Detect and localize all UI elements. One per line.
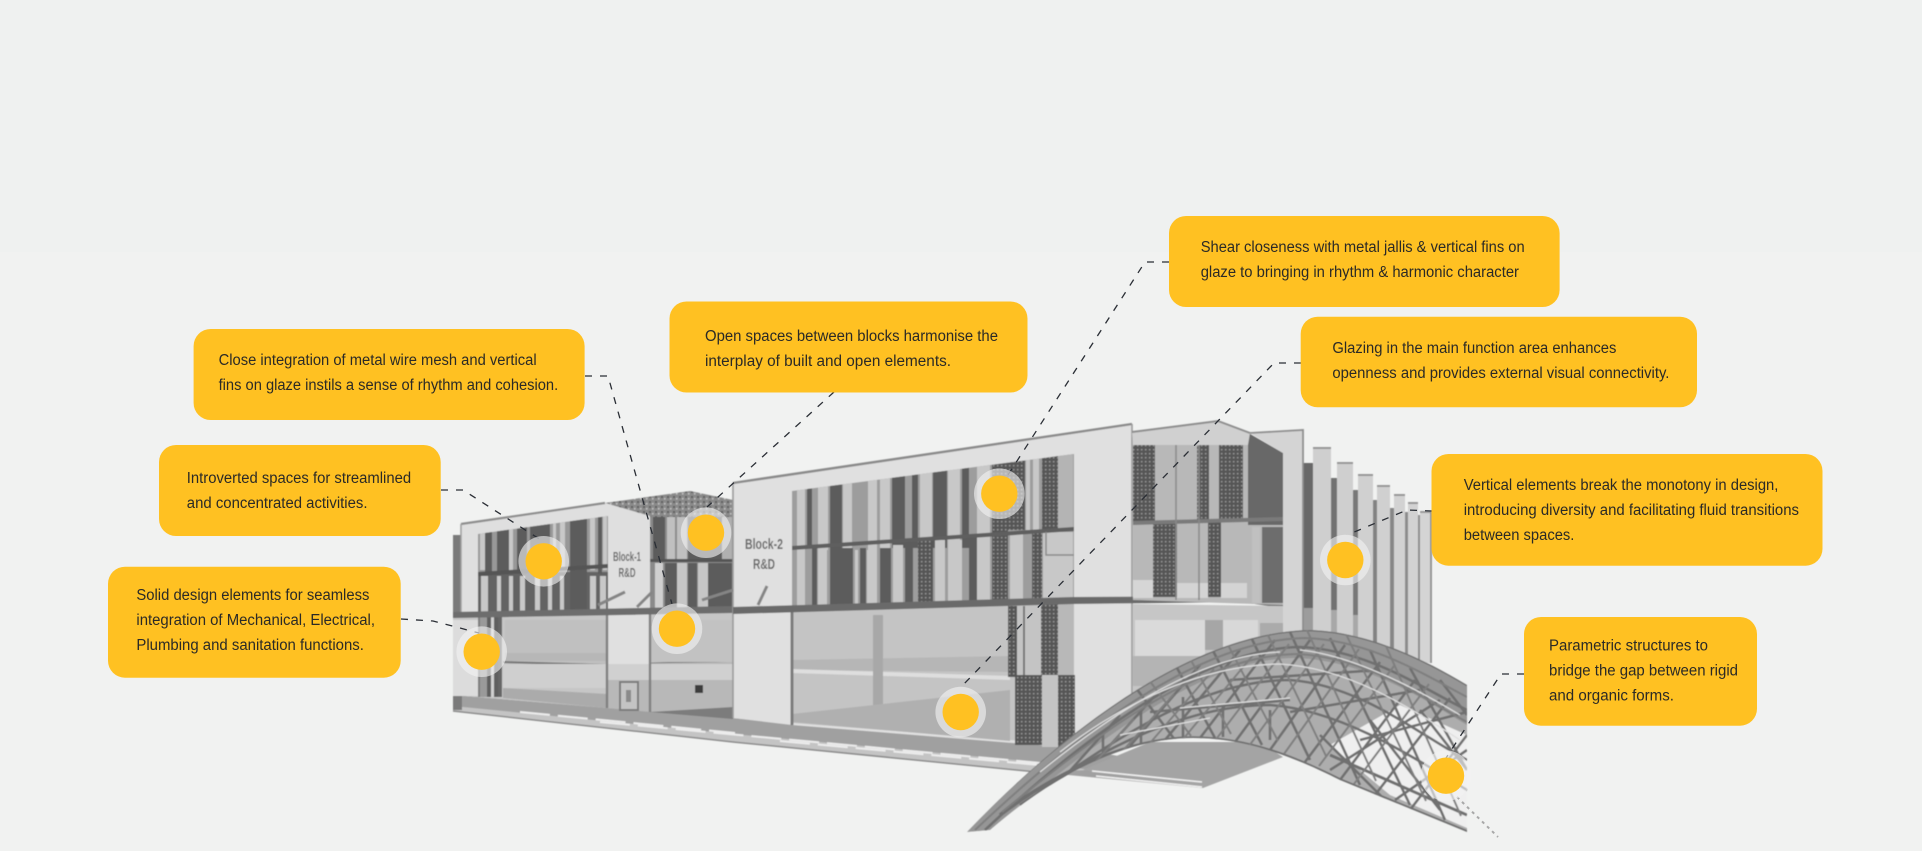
entrance struts	[598, 586, 767, 607]
marker: shear closeness	[974, 468, 1025, 519]
door	[620, 682, 638, 710]
leader: glazing	[962, 363, 1301, 686]
floor band left	[453, 606, 733, 618]
marker: solid elements	[456, 626, 507, 677]
right frame top	[1132, 421, 1250, 445]
block 1 canopy mesh	[605, 491, 733, 520]
callout: introverted spaces: and concentrated activities.	[187, 495, 368, 512]
block 1 windows	[478, 516, 608, 612]
callout: shear closeness: Shear closeness with metal jallis & vertical fins on	[1201, 239, 1525, 256]
callout: shear closeness: glaze to bringing in rhythm & harmonic character	[1201, 264, 1519, 281]
block labels: Block-1	[613, 549, 641, 564]
block 2 right upper windows	[1133, 430, 1283, 610]
callout: glazing	[1301, 317, 1697, 407]
callout: solid design elements: Solid design elements for seamless	[136, 587, 370, 604]
callout: introverted spaces	[159, 445, 441, 536]
callout: solid design elements	[108, 567, 401, 678]
ground slab	[453, 695, 1203, 788]
block labels: Block-2	[745, 536, 783, 553]
marker: wire mesh	[652, 603, 702, 654]
callout: wire mesh	[194, 329, 585, 420]
windows between blocks	[650, 517, 733, 612]
lower tier	[797, 530, 1073, 608]
callout: vertical elements: introducing diversity and facilitating fluid transitions	[1464, 502, 1799, 519]
marker: vertical elements	[1320, 535, 1371, 585]
block 1 outer strip and lower storey	[453, 535, 733, 719]
building illustration	[453, 421, 1467, 832]
callout: open spaces: interplay of built and open elements.	[705, 353, 951, 370]
marker: open spaces	[681, 507, 731, 558]
block 2 lower glazing	[792, 603, 1075, 747]
leader: open spaces	[707, 392, 834, 507]
callout: parametric structures: and organic forms.	[1549, 688, 1674, 705]
block 2 upper windows	[792, 450, 1074, 610]
dashed leader lines	[401, 262, 1524, 758]
block 2 right lower storey	[1133, 604, 1283, 700]
callout: introverted spaces: Introverted spaces for streamlined	[187, 470, 411, 487]
callout: glazing: openness and provides external visual connectivity.	[1332, 365, 1669, 382]
marker: introverted	[518, 536, 569, 587]
leader: shear closeness	[1008, 262, 1169, 475]
callout: vertical elements: Vertical elements break the monotony in design,	[1464, 477, 1778, 494]
leader: solid elements	[401, 619, 479, 633]
leader: parametric	[1446, 674, 1524, 758]
callout: glazing: Glazing in the main function area enhances	[1332, 340, 1617, 357]
callout: solid design elements: integration of Mechanical, Electrical,	[136, 612, 375, 629]
block labels: R&D	[618, 565, 636, 580]
marker: glazing	[935, 687, 986, 737]
marker: parametric	[1421, 750, 1471, 801]
callout: solid design elements: Plumbing and sanitation functions.	[136, 637, 364, 654]
callout: parametric structures	[1524, 617, 1757, 726]
callout: vertical elements: between spaces.	[1464, 527, 1574, 544]
callout: shear closeness	[1169, 216, 1560, 307]
leader: wire mesh	[585, 376, 672, 604]
callout: wire mesh: fins on glaze instils a sense of rhythm and cohesion.	[219, 377, 558, 394]
callout: wire mesh: Close integration of metal wire mesh and vertical	[219, 352, 537, 369]
small dark square	[695, 685, 703, 693]
block 2 wall frame	[733, 424, 1132, 748]
callout: open spaces	[670, 302, 1028, 392]
block labels	[613, 536, 783, 580]
dome floor	[1083, 742, 1283, 788]
callout: parametric structures: Parametric structures to	[1549, 638, 1708, 655]
dotted extension below marker	[1457, 797, 1498, 837]
callout: open spaces: Open spaces between blocks harmonise the	[705, 328, 998, 345]
leader: vertical elements	[1347, 510, 1432, 535]
leader: introverted	[441, 490, 544, 542]
floor band block 2	[733, 596, 1283, 614]
block labels: R&D	[753, 556, 775, 573]
parametric dome	[967, 628, 1467, 832]
outer lattice band	[967, 630, 1467, 832]
vertical fins	[1250, 430, 1431, 693]
callout: vertical elements	[1432, 454, 1822, 566]
block 1 wall frame	[461, 503, 650, 616]
callout: parametric structures: bridge the gap between rigid	[1549, 663, 1738, 680]
dome shell	[1006, 658, 1468, 830]
marker dots	[456, 468, 1471, 801]
